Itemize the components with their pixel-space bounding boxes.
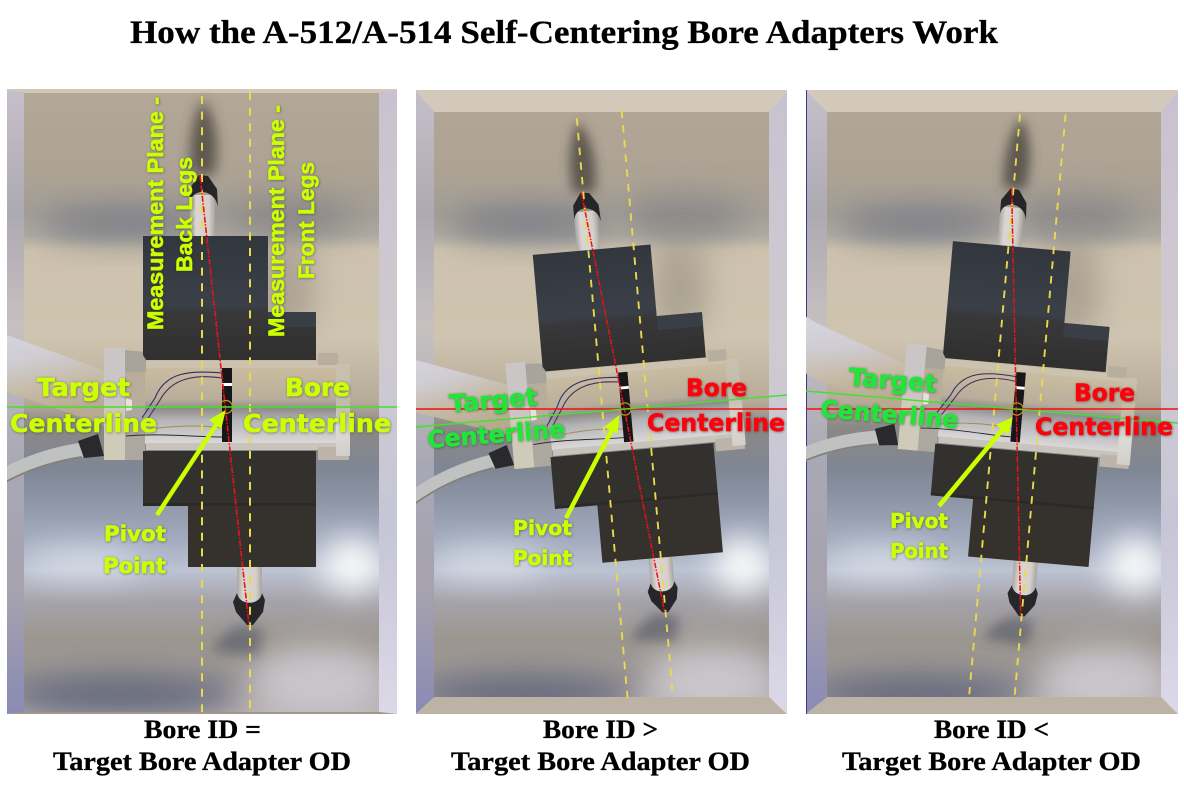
chamber walls — [806, 90, 1178, 714]
label: pivot point: Pivot — [513, 516, 572, 540]
arrow: to pivot point — [566, 416, 619, 518]
caption: third panel — [842, 715, 1141, 776]
panel: bore ID less than target — [806, 90, 1178, 714]
panel: bore ID greater than target — [416, 90, 787, 714]
caption: second panel: Bore ID > — [543, 715, 658, 744]
label: target centerline: Centerline — [10, 409, 157, 438]
label: pivot point: Pivot — [890, 509, 948, 533]
caption: third panel: Target Bore Adapter OD — [842, 747, 1141, 776]
label: target centerline — [10, 373, 157, 438]
title: How the A-512/A-514 Self-Centering Bore Adapters Work — [130, 15, 999, 51]
label: bore centerline: Bore — [1074, 379, 1135, 407]
panel: bore ID equals target — [0, 89, 397, 716]
bore adapter assembly, level — [0, 92, 350, 712]
target centerline — [806, 391, 1178, 423]
label: measurement plane back legs: Measurement Plane - — [143, 97, 168, 330]
panel background: third chamber — [803, 89, 1171, 716]
label: bore centerline — [1035, 379, 1173, 441]
label: bore centerline: Centerline — [647, 409, 785, 437]
arrow: to pivot point — [939, 418, 1012, 506]
bore centerline — [416, 408, 787, 410]
label: bore centerline: Bore — [686, 374, 747, 402]
label: target centerline: Centerline — [820, 395, 959, 434]
label: bore centerline — [647, 374, 785, 437]
label: measurement plane front legs: Measurement Plane - — [264, 105, 289, 337]
label: bore centerline: Centerline — [1035, 413, 1173, 441]
label: pivot point — [103, 522, 166, 578]
label: target centerline: Centerline — [426, 415, 566, 454]
caption: second panel — [451, 715, 750, 776]
caption: third panel: Bore ID < — [934, 715, 1049, 744]
label: measurement plane front legs: Front Legs — [294, 162, 319, 279]
caption: first panel: Target Bore Adapter OD — [53, 747, 351, 776]
panel background: first chamber — [0, 89, 390, 716]
panel background: second chamber — [410, 89, 779, 716]
label: bore centerline — [243, 373, 391, 438]
chamber walls — [416, 90, 787, 714]
label: target centerline: Target — [448, 383, 538, 418]
label: pivot point: Point — [513, 546, 572, 570]
label: target centerline — [820, 366, 960, 430]
bore centerline — [806, 408, 1178, 410]
label: pivot point: Point — [890, 539, 948, 563]
label: pivot point: Point — [103, 554, 166, 578]
target centerline — [416, 395, 787, 427]
caption: first panel — [53, 715, 351, 776]
label: pivot point: Pivot — [104, 522, 166, 546]
label: bore centerline: Centerline — [243, 409, 391, 438]
label: pivot point — [513, 516, 572, 570]
label: bore centerline: Bore — [285, 373, 350, 402]
label: pivot point — [890, 509, 948, 563]
label: target centerline — [427, 387, 566, 450]
label: target centerline: Target — [848, 363, 937, 398]
chamber walls — [7, 89, 397, 714]
caption: second panel: Target Bore Adapter OD — [451, 747, 750, 776]
target and bore centerline — [7, 406, 397, 408]
label: target centerline: Target — [37, 373, 130, 402]
bore adapter assembly, tilted clockwise — [806, 114, 1144, 695]
label: measurement plane front legs — [264, 105, 319, 337]
label: measurement plane back legs: Back Legs — [172, 157, 197, 272]
bore adapter assembly, tilted counter-clockwise — [349, 102, 767, 718]
arrow: to pivot point — [157, 411, 225, 515]
label: measurement plane back legs — [143, 97, 197, 330]
caption: first panel: Bore ID = — [144, 715, 261, 744]
